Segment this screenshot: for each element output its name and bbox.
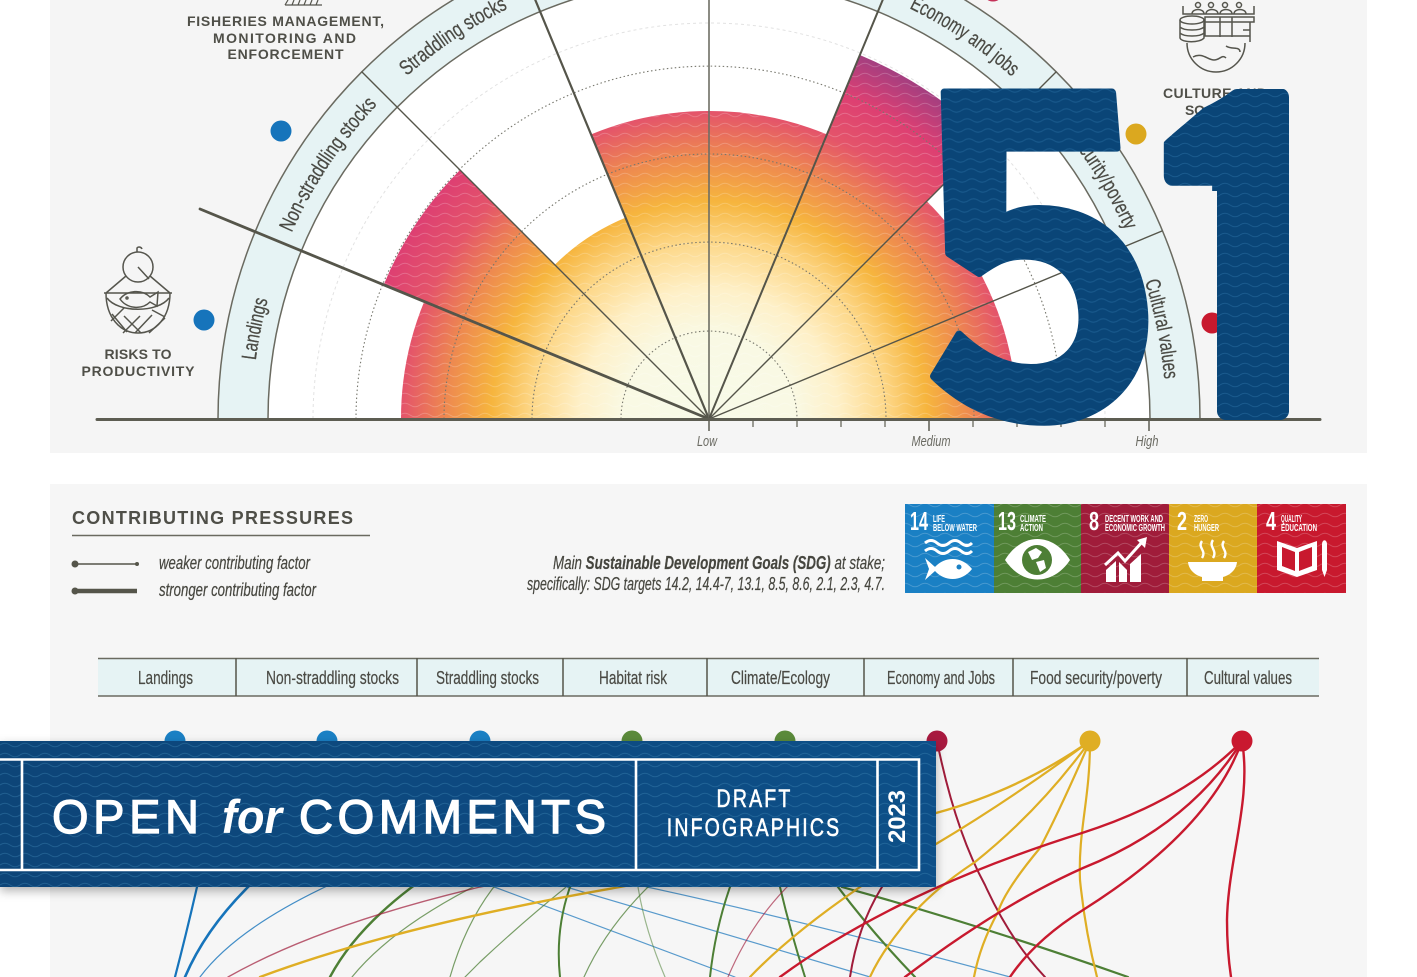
text: SDG note: specifically: SDG targets 14.2, 14.4-7, 13.1, 8.5, 8.6, 2.1, 2.3, 4.7. — [527, 574, 885, 594]
table header: pressure categories: Straddling stocks — [436, 668, 539, 688]
tile: SDG 2: HUNGER — [1194, 523, 1219, 534]
tile: SDG 2 — [1169, 504, 1257, 593]
tile: SDG 4: 4 — [1266, 506, 1276, 536]
heading: culture and society — [1163, 85, 1267, 118]
banner title: OPEN — [52, 790, 199, 843]
heading: fisheries management — [187, 13, 384, 62]
tile: SDG 2: ZERO — [1194, 514, 1208, 525]
banner year: 2023 — [884, 790, 911, 843]
tile: SDG 13 — [994, 504, 1081, 593]
tile: SDG 14: BELOW WATER — [933, 523, 977, 534]
text: SDG note — [527, 553, 885, 594]
icon: fisheries management fragment — [285, 0, 322, 5]
band labels — [242, 0, 1176, 378]
red curves — [780, 741, 1244, 977]
banner title: COMMENTS — [299, 790, 606, 843]
axis labels: Medium — [912, 433, 950, 450]
banner: open for comments — [0, 741, 936, 887]
tile: SDG 4 — [1257, 504, 1346, 593]
crimson curves — [228, 741, 1045, 977]
tile: SDG 8: ECONOMIC GROWTH — [1105, 523, 1165, 534]
legend: line weights: weaker contributing factor — [159, 553, 311, 573]
panel: contributing pressures — [50, 484, 1367, 977]
heading: culture and society: SOCIETY — [1185, 102, 1246, 118]
heading: fisheries management: ENFORCEMENT — [228, 46, 344, 62]
heading: culture and society: CULTURE AND — [1163, 85, 1267, 101]
tile: SDG 14 — [905, 504, 994, 593]
tile: SDG 4: EDUCATION — [1281, 523, 1317, 534]
table header: pressure categories — [98, 658, 1319, 696]
heading: contributing pressures: CONTRIBUTING PRESSURES — [72, 508, 353, 528]
tile: SDG 8: DECENT WORK AND — [1105, 514, 1163, 525]
category dots — [164, 730, 1252, 752]
banner subtitle: INFOGRAPHICS — [667, 814, 841, 842]
yellow curves — [260, 741, 1097, 977]
table header: pressure categories: Food security/poverty — [1030, 668, 1162, 688]
banner subtitle — [667, 785, 841, 842]
tile: SDG 2: 2 — [1177, 506, 1187, 536]
text: SDG note: Main Sustainable Development Goals (SDG) at stake; — [553, 553, 885, 573]
heading: risks to productivity: RISKS TO — [104, 346, 172, 362]
panel: risk radial chart — [50, 0, 1367, 453]
heading: risks to productivity — [82, 346, 195, 379]
heading: fisheries management: FISHERIES MANAGEMENT, — [187, 13, 384, 29]
legend: line weights — [72, 553, 317, 600]
category dots on chart — [194, 0, 1222, 334]
blue curves — [175, 741, 1010, 977]
banner subtitle: DRAFT — [717, 785, 792, 813]
table header: pressure categories: Landings — [138, 668, 193, 688]
SDG tiles — [905, 504, 1346, 593]
band labels: Food security/poverty — [1080, 152, 1136, 228]
tile: SDG 4: QUALITY — [1281, 514, 1302, 525]
band labels: Landings — [242, 298, 270, 360]
table header: pressure categories: Habitat risk — [599, 668, 668, 688]
banner title — [52, 790, 606, 843]
legend: line weights: stronger contributing factor — [159, 580, 317, 600]
tile: SDG 8: 8 — [1089, 506, 1099, 536]
band labels: Non-straddling stocks — [279, 98, 376, 232]
big infographic number — [930, 88, 1289, 426]
axis labels — [697, 433, 1158, 450]
band labels: Cultural values — [1146, 280, 1176, 378]
axis labels: High — [1136, 433, 1158, 450]
tile: SDG 13: CLIMATE — [1020, 514, 1046, 525]
table header: pressure categories: Non-straddling stocks — [266, 668, 399, 688]
table header: pressure categories: Economy and Jobs — [887, 668, 995, 688]
chart: semicircular risk wedges — [97, 0, 1320, 431]
tile: SDG 8 — [1081, 504, 1169, 593]
axis labels: Low — [697, 433, 718, 450]
connection curves — [175, 741, 1244, 977]
icon: culture and society — [1180, 2, 1254, 72]
table header: pressure categories: Climate/Ecology — [731, 668, 830, 688]
tile: SDG 14: LIFE — [933, 514, 945, 525]
green curves — [330, 741, 1128, 977]
heading: fisheries management: MONITORING AND — [213, 30, 356, 46]
table header: pressure categories: Cultural values — [1204, 668, 1292, 688]
tile: SDG 13: ACTION — [1020, 523, 1043, 534]
heading: risks to productivity: PRODUCTIVITY — [82, 363, 195, 379]
tile: SDG 13: 13 — [998, 506, 1016, 536]
tile: SDG 14: 14 — [910, 506, 928, 536]
banner title: for — [222, 790, 285, 843]
icon: fish in net — [104, 247, 172, 333]
